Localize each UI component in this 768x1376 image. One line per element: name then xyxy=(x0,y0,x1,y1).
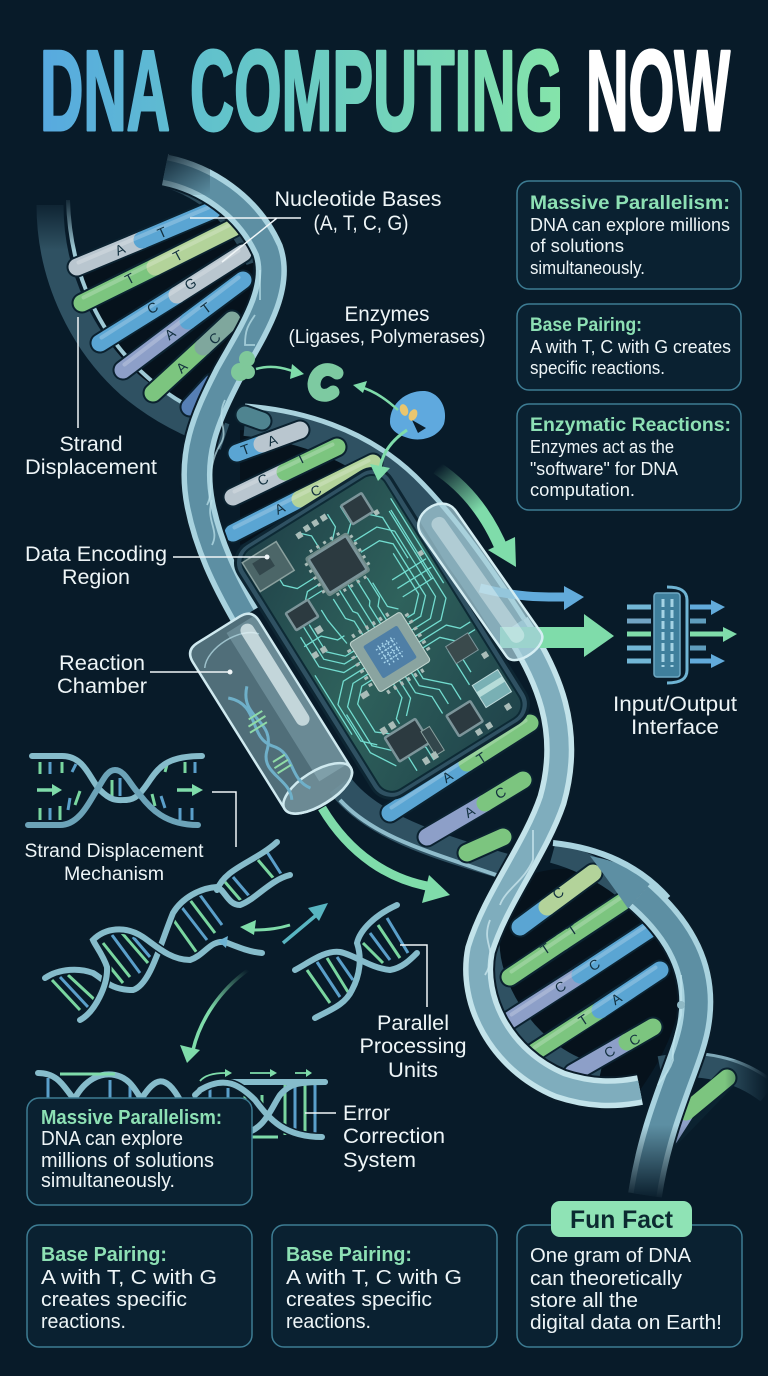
base pair rungs: top loop xyxy=(77,208,243,407)
base pair rungs: bottom loop: C xyxy=(552,977,569,996)
label: nucleotide bases xyxy=(190,188,442,262)
base pair rungs: middle loop xyxy=(233,415,373,533)
label: reaction chamber xyxy=(57,652,232,698)
title: DNA xyxy=(40,28,170,155)
helix interior shadow xyxy=(75,200,681,1090)
strand displacement mechanism diagram xyxy=(28,756,203,825)
base pair rungs: middle loop: A xyxy=(272,499,288,518)
label: nucleotide bases: Nucleotide Bases xyxy=(274,188,442,211)
reaction chamber xyxy=(186,609,360,823)
panel: base pairing top xyxy=(517,304,741,390)
label: strand displacement mechanism: Strand Displacement xyxy=(24,841,204,862)
main DNA helix xyxy=(50,170,768,1195)
base pair rungs: bottom loop: C xyxy=(549,884,567,902)
base pair rungs: below chip xyxy=(390,720,530,853)
panel: fun fact: can theoretically xyxy=(530,1268,682,1290)
label: data encoding region: Region xyxy=(62,566,130,589)
base pair rungs: middle loop: C xyxy=(255,470,271,489)
base pair rungs: below chip: T xyxy=(473,749,490,767)
arrow: chamber to lower xyxy=(322,808,450,903)
error correction helix xyxy=(38,1069,325,1137)
label: nucleotide bases: (A, T, C, G) xyxy=(314,212,408,235)
label: input output interface xyxy=(613,693,737,739)
label: parallel processing units: Parallel xyxy=(377,1012,449,1035)
base pair rungs: bottom loop: T xyxy=(537,940,554,958)
arrow: enzyme to enzyme xyxy=(256,364,304,379)
back ribbon: top left xyxy=(50,178,255,437)
base pair rungs: top loop: A xyxy=(173,358,191,376)
panel: massive parallelism bottom: simultaneously. xyxy=(41,1170,175,1192)
panel: enzymatic reactions: Enzymatic Reactions: xyxy=(530,415,731,436)
label: strand displacement mechanism: Mechanism xyxy=(64,864,164,885)
panel: massive parallelism top: simultaneously. xyxy=(530,258,645,278)
panel: massive parallelism bottom xyxy=(27,1098,252,1205)
base pair rungs: middle loop: A xyxy=(265,431,280,449)
base pair rungs: top loop: C xyxy=(205,329,224,348)
base pair rungs: below chip: A xyxy=(439,767,456,786)
panel: enzymatic reactions: computation. xyxy=(530,480,635,500)
circuit traces xyxy=(246,480,522,790)
label: error correction system xyxy=(305,1102,445,1172)
base pair rungs: middle loop: C xyxy=(308,481,324,500)
label: parallel processing units: Processing xyxy=(360,1035,466,1058)
parallel helix right xyxy=(295,905,417,1018)
panel: base pairing middle: Base Pairing: xyxy=(286,1244,412,1266)
label: error correction system: Correction xyxy=(343,1125,445,1148)
panel: base pairing left: Base Pairing: xyxy=(41,1244,167,1266)
panel: base pairing left xyxy=(27,1225,252,1347)
icon: green enzyme xyxy=(314,370,337,395)
panel: fun fact: Fun Fact xyxy=(570,1206,674,1234)
panel: base pairing middle: reactions. xyxy=(286,1311,371,1333)
label: data encoding region: Data Encoding xyxy=(25,543,167,566)
panel: massive parallelism bottom: Massive Parallelism: xyxy=(41,1107,222,1129)
panel: fun fact: store all the xyxy=(530,1290,638,1312)
label: reaction chamber: Chamber xyxy=(57,675,147,698)
back ribbon: lower band xyxy=(340,785,768,1092)
label: reaction chamber: Reaction xyxy=(59,652,145,675)
base pair rungs: bottom loop: T xyxy=(564,921,581,939)
arrow: curved green down xyxy=(180,970,248,1063)
parallel helix left xyxy=(45,842,290,1020)
label: enzymes xyxy=(288,303,486,348)
arrow: blue enzyme to green enzyme xyxy=(353,381,398,410)
label: input output interface: Input/Output xyxy=(613,693,737,716)
base pair rungs: below chip: A xyxy=(461,802,478,821)
glass capsule on board xyxy=(411,496,548,666)
base pair rungs: top loop: G xyxy=(181,274,199,293)
panel: enzymatic reactions xyxy=(517,404,741,510)
panel: massive parallelism top: of solutions xyxy=(530,236,624,256)
label: enzymes: (Ligases, Polymerases) xyxy=(288,327,486,348)
base pair rungs: top loop: C xyxy=(144,298,161,317)
panel: base pairing top: specific reactions. xyxy=(530,358,665,378)
base pair rungs: bottom loop: A xyxy=(608,989,625,1008)
base pair rungs: top loop: T xyxy=(155,223,170,241)
base pair rungs: bottom loop: C xyxy=(601,1042,618,1061)
label: strand displacement xyxy=(25,317,157,479)
panel: base pairing left: creates specific xyxy=(41,1289,187,1311)
front ribbon: top xyxy=(165,170,271,615)
label: strand displacement: Strand xyxy=(60,433,122,456)
base pair rungs: bottom loop: C xyxy=(626,1030,643,1049)
base pair rungs: middle loop: T xyxy=(293,449,309,468)
base pair rungs: top loop: A xyxy=(112,240,128,259)
front ribbon: right xyxy=(478,625,640,1093)
base pair rungs: bottom loop xyxy=(510,873,727,1137)
arrow: green left xyxy=(240,920,290,935)
input output interface icon xyxy=(627,587,737,683)
DNA inside chamber xyxy=(227,686,310,801)
small chips xyxy=(242,478,522,793)
label: input output interface: Interface xyxy=(631,716,719,739)
panel: enzymatic reactions: "software" for DNA xyxy=(530,459,678,479)
base pair rungs: top loop: T xyxy=(170,246,186,265)
base pair rungs: below chip: C xyxy=(492,783,509,802)
arrow: green output xyxy=(500,614,614,657)
DNA processor chip centre xyxy=(341,603,439,701)
base pair rungs: bottom loop: T xyxy=(575,1011,592,1029)
chip circuit board xyxy=(227,460,537,807)
panel: base pairing left: A with T, C with G xyxy=(41,1267,217,1289)
label: parallel processing units: Units xyxy=(388,1059,438,1082)
panel: base pairing middle: A with T, C with G xyxy=(286,1267,462,1289)
label: enzymes: Enzymes xyxy=(344,303,430,326)
front ribbon: lower right xyxy=(553,843,696,1195)
base pair rungs: middle loop: T xyxy=(239,440,252,458)
label: strand displacement mechanism xyxy=(24,792,236,885)
label: parallel processing units xyxy=(360,945,466,1082)
panel: massive parallelism bottom: DNA can explore xyxy=(41,1128,183,1150)
base pair rungs: bottom loop: C xyxy=(586,955,603,974)
panel: fun fact: digital data on Earth! xyxy=(530,1312,722,1334)
label: error correction system: Error xyxy=(343,1102,390,1125)
panel: enzymatic reactions: Enzymes act as the xyxy=(530,437,674,457)
icon: blue enzyme xyxy=(390,391,445,439)
panel: massive parallelism top: Massive Parallelism: xyxy=(530,193,730,214)
panel: fun fact: One gram of DNA xyxy=(530,1245,692,1267)
panel: base pairing middle xyxy=(272,1225,497,1347)
arrow: teal up right xyxy=(283,903,328,943)
panel: massive parallelism top xyxy=(517,181,741,289)
panel: base pairing top: A with T, C with G creates xyxy=(530,337,731,357)
arrow: to processing right xyxy=(437,468,516,567)
processor chip upper xyxy=(300,527,376,602)
panel: base pairing top: Base Pairing: xyxy=(530,315,642,336)
panel: base pairing left: reactions. xyxy=(41,1311,126,1333)
arrow: blue left xyxy=(218,936,228,948)
base pair rungs: top loop: T xyxy=(198,299,215,317)
panel: massive parallelism top: DNA can explore millions xyxy=(530,215,730,235)
panel: base pairing middle: creates specific xyxy=(286,1289,432,1311)
back ribbon: centre arc xyxy=(245,406,528,640)
label: strand displacement: Displacement xyxy=(25,456,157,479)
panel: fun fact xyxy=(517,1201,742,1347)
arrow: blue output xyxy=(480,586,584,610)
base pair rungs: top loop: A xyxy=(161,324,179,343)
base pair rungs: top loop: T xyxy=(122,269,138,288)
panel: massive parallelism bottom: millions of solutions xyxy=(41,1150,214,1172)
label: data encoding region xyxy=(25,543,270,589)
icon: enzyme on strand xyxy=(231,351,255,381)
label: error correction system: System xyxy=(343,1149,416,1172)
arrow: blue enzyme to board xyxy=(370,430,407,481)
